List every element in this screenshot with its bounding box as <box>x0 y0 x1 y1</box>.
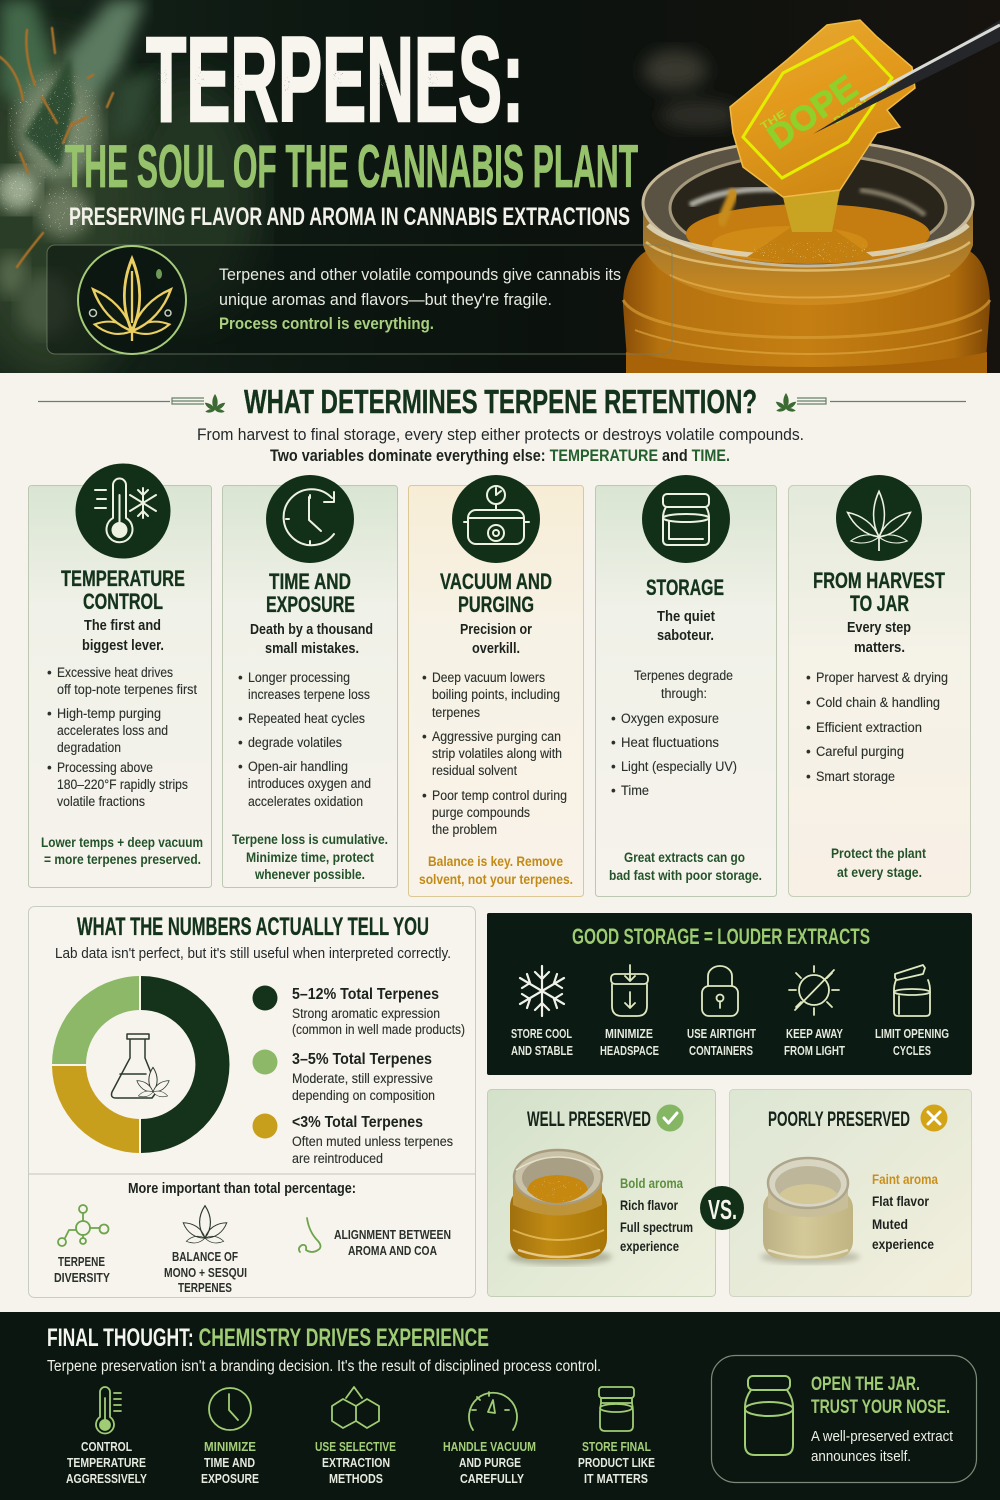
bullet list: • <box>611 783 616 798</box>
item: limit opening: LIMIT OPENING <box>875 1027 949 1041</box>
step: minimize time: MINIMIZE <box>204 1440 256 1454</box>
card takeaway: Minimize time, protect <box>246 849 374 865</box>
bullet list: increases terpene loss <box>248 687 370 702</box>
intro text: Process control is everything. <box>219 314 434 333</box>
legend: 3-5 percent: depending on composition <box>292 1088 435 1103</box>
bullet list <box>47 665 197 809</box>
card tagline: Precision or <box>460 622 532 638</box>
comparison text: experience <box>872 1236 934 1252</box>
callout: open the jar <box>712 1356 976 1482</box>
step: vacuum gauge: HANDLE VACUUM <box>443 1440 536 1454</box>
card takeaway: Lower temps + deep vacuum <box>41 834 203 850</box>
comparison text: Faint aroma <box>872 1171 938 1187</box>
bullet list: • <box>47 665 52 680</box>
bullet list: • <box>238 735 243 750</box>
icon: molecule with label <box>54 1205 111 1285</box>
card tagline <box>847 620 911 656</box>
panel: hero banner <box>0 0 1000 380</box>
bullet list: • <box>238 711 243 726</box>
card takeaway: Great extracts can go <box>624 849 745 865</box>
card takeaway <box>41 834 203 867</box>
step: selective extraction: EXTRACTION <box>322 1456 390 1470</box>
card tagline: Death by a thousand <box>250 622 373 638</box>
card takeaway: at every stage. <box>837 864 922 880</box>
title <box>146 11 524 147</box>
intro text: Terpenes and other volatile compounds give cannabis its <box>219 265 621 284</box>
step: store final product <box>578 1387 655 1486</box>
bullet list: degrade volatiles <box>248 735 342 750</box>
card tagline: The first and <box>84 618 161 634</box>
bullet list: Heat fluctuations <box>621 735 719 750</box>
bullet list: • <box>806 769 811 784</box>
bullet list: • <box>238 670 243 685</box>
item: airtight containers <box>687 966 756 1058</box>
bullet list: Poor temp control during <box>432 788 567 803</box>
comparison text: Bold aroma <box>620 1175 683 1191</box>
bullet list: introduces oxygen and <box>248 776 371 791</box>
bullet list: Excessive heat drives <box>57 665 173 680</box>
item: store cool: STORE COOL <box>511 1027 572 1041</box>
image: jar of amber extract <box>623 20 990 373</box>
step: control temperature: CONTROL <box>81 1440 132 1454</box>
card tagline: matters. <box>854 640 905 656</box>
section intro text: From harvest to final storage, every step either protects or destroys volatile compounds. <box>197 426 804 444</box>
icon: jar <box>642 475 730 563</box>
card heading: CONTROL <box>83 589 163 614</box>
legend: 5-12 percent: Strong aromatic expression <box>292 1006 440 1021</box>
callout headline: TRUST YOUR NOSE. <box>811 1397 950 1418</box>
bullet list <box>611 668 737 798</box>
bullet list: • <box>806 744 811 759</box>
card tagline: The quiet <box>657 609 715 625</box>
item: airtight containers: USE AIRTIGHT <box>687 1027 756 1041</box>
callout text: A well-preserved extract <box>811 1429 953 1445</box>
heading: terpene retention: WHAT DETERMINES TERPENE RETENTION? <box>244 383 757 420</box>
bullet list: • <box>806 720 811 735</box>
tagline: PRESERVING FLAVOR AND AROMA IN CANNABIS EXTRACTIONS <box>69 203 630 231</box>
title: TERPENES: <box>146 11 524 147</box>
bullet list <box>238 670 371 809</box>
item: minimize headspace: HEADSPACE <box>600 1044 659 1058</box>
item: keep from light: FROM LIGHT <box>784 1044 845 1058</box>
section intro text <box>197 426 804 465</box>
step: store final product: STORE FINAL <box>582 1440 651 1454</box>
icon: cannabis leaf <box>836 475 922 561</box>
bullet list: Oxygen exposure <box>621 711 719 726</box>
card heading: FROM HARVEST <box>813 568 945 593</box>
card heading <box>813 568 945 616</box>
card takeaway: bad fast with poor storage. <box>609 867 762 883</box>
icon: vacuum pot <box>452 475 540 563</box>
callout headline: OPEN THE JAR. <box>811 1374 920 1395</box>
panel: good storage <box>487 913 972 1075</box>
logo on extract slab: DOPE <box>761 68 865 157</box>
panel: vacuum and purging <box>408 475 584 896</box>
sub-heading: more important: More important than total percentage: <box>128 1181 356 1197</box>
panel heading: GOOD STORAGE = LOUDER EXTRACTS <box>572 924 870 949</box>
bullet list: 180–220°F rapidly strips <box>57 777 188 792</box>
item: airtight containers: CONTAINERS <box>689 1044 753 1058</box>
card takeaway: solvent, not your terpenes. <box>419 871 573 887</box>
bullet list: • <box>806 695 811 710</box>
bullet list: Open-air handling <box>248 759 348 774</box>
card heading: TO JAR <box>850 591 909 616</box>
bullet list: Proper harvest & drying <box>816 670 948 685</box>
footer intro: Terpene preservation isn't a branding decision. It's the result of disciplined process control. <box>47 1358 601 1375</box>
bullet list: Longer processing <box>248 670 350 685</box>
card tagline <box>82 618 164 654</box>
step: vacuum gauge <box>443 1392 536 1486</box>
bullet list: Careful purging <box>816 744 904 759</box>
bullet list: Efficient extraction <box>816 720 922 735</box>
bullet list: • <box>422 729 427 744</box>
card tagline: biggest lever. <box>82 638 164 654</box>
item: store cool <box>511 966 573 1058</box>
icon: jar outline <box>745 1376 793 1455</box>
card takeaway: Balance is key. Remove <box>428 853 563 869</box>
card heading: EXPOSURE <box>266 592 355 617</box>
callout headline <box>811 1374 950 1418</box>
step: control temperature: TEMPERATURE <box>67 1456 146 1470</box>
panel: from harvest to jar <box>788 475 970 896</box>
bullet list: Processing above <box>57 760 153 775</box>
bullet list <box>422 670 567 837</box>
legend: 3-5 percent: Moderate, still expressive <box>292 1071 433 1086</box>
icon: cannabis leaf badge <box>78 246 186 354</box>
card heading <box>266 569 355 617</box>
icon: nose with label: AROMA AND COA <box>348 1244 437 1258</box>
item: minimize headspace: MINIMIZE <box>605 1027 653 1041</box>
bullet list: through: <box>661 686 707 701</box>
bullet list: Deep vacuum lowers <box>432 670 545 685</box>
item: limit opening: CYCLES <box>893 1044 931 1058</box>
bullet list: Repeated heat cycles <box>248 711 365 726</box>
bullet list: the problem <box>432 822 497 837</box>
bullet list: • <box>611 735 616 750</box>
comparison text: experience <box>620 1238 679 1254</box>
step: vacuum gauge: AND PURGE <box>459 1456 521 1470</box>
logo on extract slab: THE <box>759 108 789 133</box>
card heading: VACUUM AND <box>440 569 552 594</box>
comparison text: Full spectrum <box>620 1219 693 1235</box>
legend: 3-5 percent: 3–5% Total Terpenes <box>292 1051 432 1068</box>
bullet list: • <box>422 670 427 685</box>
card tagline: Every step <box>847 620 911 636</box>
panel: time and exposure <box>222 475 398 888</box>
bullet list: • <box>238 759 243 774</box>
bullet list: accelerates oxidation <box>248 794 363 809</box>
step: selective extraction: USE SELECTIVE <box>315 1440 396 1454</box>
card tagline <box>250 622 373 657</box>
card takeaway <box>419 853 573 887</box>
panel: what the numbers tell you <box>28 906 476 1298</box>
bullet list: Cold chain & handling <box>816 695 940 710</box>
bullet list: off top-note terpenes first <box>57 682 197 697</box>
bullet list: Aggressive purging can <box>432 729 561 744</box>
card takeaway <box>831 845 926 880</box>
bullet list: • <box>806 670 811 685</box>
icon: molecule with label: TERPENE <box>58 1255 105 1269</box>
intro callout box <box>47 245 672 354</box>
card tagline <box>657 609 715 644</box>
item: keep from light: KEEP AWAY <box>786 1027 844 1041</box>
icon: leaf with label: MONO + SESQUI <box>164 1266 247 1280</box>
bullet list: Time <box>621 783 649 798</box>
image: cannabis flower <box>0 0 260 380</box>
comparison text: Rich flavor <box>620 1197 678 1213</box>
comparison text <box>872 1171 938 1252</box>
callout text: announces itself. <box>811 1449 911 1465</box>
flower trichomes <box>0 70 103 238</box>
comparison text <box>620 1175 693 1254</box>
item: keep from light <box>784 966 845 1058</box>
bullet list: terpenes <box>432 705 480 720</box>
bullet list: • <box>422 788 427 803</box>
icon: leaf with label: BALANCE OF <box>172 1250 238 1264</box>
legend: under 3 percent: Often muted unless terpenes <box>292 1134 453 1149</box>
bullet list: Light (especially UV) <box>621 759 737 774</box>
bullet list <box>806 670 948 784</box>
comparison heading: POORLY PRESERVED <box>768 1108 910 1131</box>
bullet list: purge compounds <box>432 805 530 820</box>
card takeaway: whenever possible. <box>254 866 365 882</box>
callout text <box>811 1429 953 1465</box>
bullet list: boiling points, including <box>432 687 560 702</box>
card takeaway: = more terpenes preserved. <box>44 851 201 867</box>
card heading <box>440 569 552 617</box>
logo on extract slab <box>743 37 892 178</box>
card takeaway: Protect the plant <box>831 845 926 861</box>
image: pale jar <box>760 1158 860 1264</box>
section intro text: Two variables dominate everything else: TEMPERATURE and TIME. <box>270 447 730 465</box>
logo on extract slab: DEPOT <box>832 96 872 126</box>
card heading: PURGING <box>458 592 534 617</box>
card heading: STORAGE <box>646 575 724 600</box>
background bokeh <box>643 50 740 129</box>
bullet list: residual solvent <box>432 763 517 778</box>
legend: 5-12 percent <box>252 986 465 1037</box>
bullet list: High-temp purging <box>57 706 161 721</box>
item: minimize headspace <box>600 965 659 1058</box>
card takeaway <box>232 831 388 882</box>
panel: well preserved <box>488 1090 716 1296</box>
card tagline: overkill. <box>472 641 520 657</box>
step: minimize time: TIME AND <box>204 1456 255 1470</box>
intro text <box>219 265 621 333</box>
bullet list: • <box>47 760 52 775</box>
legend: 5-12 percent: 5–12% Total Terpenes <box>292 986 439 1003</box>
legend: under 3 percent: are reintroduced <box>292 1151 383 1166</box>
comparison heading: WELL PRESERVED <box>527 1108 651 1131</box>
bullet list: • <box>611 711 616 726</box>
card takeaway <box>609 849 762 883</box>
item: store cool: AND STABLE <box>511 1044 573 1058</box>
panel subtitle: Lab data isn't perfect, but it's still useful when interpreted correctly. <box>55 946 451 962</box>
comparison text: Muted <box>872 1216 908 1232</box>
bullet list: Terpenes degrade <box>634 668 733 683</box>
card takeaway: Terpene loss is cumulative. <box>232 831 388 847</box>
card tagline <box>460 622 532 657</box>
icon: nose with label <box>299 1218 451 1258</box>
image: amber jar <box>508 1150 612 1265</box>
comparison text: Flat flavor <box>872 1193 929 1209</box>
card heading <box>61 566 185 614</box>
step: control temperature: AGGRESSIVELY <box>66 1472 148 1486</box>
badge: versus <box>700 1186 744 1230</box>
icon: thermometer and snowflake <box>76 464 170 558</box>
icon: leaf with label <box>164 1206 247 1295</box>
icon: clock with arrow <box>266 475 354 563</box>
bullet list: • <box>611 759 616 774</box>
step: selective extraction <box>315 1387 396 1486</box>
panel: storage <box>596 475 776 896</box>
panel: temperature control <box>28 464 212 888</box>
card tagline: saboteur. <box>657 628 714 644</box>
panel: poorly preserved <box>730 1090 972 1296</box>
badge: versus: VS. <box>708 1194 737 1225</box>
step: store final product: PRODUCT LIKE <box>578 1456 655 1470</box>
step: vacuum gauge: CAREFULLY <box>460 1472 525 1486</box>
bullet list: Smart storage <box>816 769 895 784</box>
icon: nose with label: ALIGNMENT BETWEEN <box>334 1228 451 1242</box>
panel: final thought footer <box>0 1312 1000 1500</box>
intro text: unique aromas and flavors—but they're fragile. <box>219 290 552 309</box>
legend: under 3 percent <box>252 1114 453 1166</box>
icon: leaf with label: TERPENES <box>178 1281 232 1295</box>
panel heading: WHAT THE NUMBERS ACTUALLY TELL YOU <box>77 913 429 941</box>
icon: molecule with label: DIVERSITY <box>54 1271 111 1285</box>
bullet list: • <box>47 706 52 721</box>
legend: 5-12 percent: (common in well made products) <box>292 1022 465 1037</box>
icon: flask with leaf <box>112 1034 171 1098</box>
legend: under 3 percent: <3% Total Terpenes <box>292 1114 423 1131</box>
card heading: TIME AND <box>269 569 351 594</box>
card tagline: small mistakes. <box>265 641 359 657</box>
step: minimize time: EXPOSURE <box>201 1472 259 1486</box>
step: minimize time <box>201 1388 259 1486</box>
bullet list: accelerates loss and <box>57 723 168 738</box>
item: limit opening <box>875 965 949 1058</box>
legend: 3-5 percent <box>252 1050 435 1103</box>
panel: main cream section <box>0 373 1000 1312</box>
step: selective extraction: METHODS <box>329 1472 383 1486</box>
step: store final product: IT MATTERS <box>584 1472 648 1486</box>
card heading: TEMPERATURE <box>61 566 185 591</box>
donut chart <box>52 976 229 1153</box>
bullet list: degradation <box>57 740 121 755</box>
step: control temperature <box>66 1387 148 1486</box>
footer heading: FINAL THOUGHT: CHEMISTRY DRIVES EXPERIENCE <box>47 1324 489 1352</box>
bullet list: strip volatiles along with <box>432 746 562 761</box>
icon: metal tweezers <box>813 20 1000 134</box>
bullet list: volatile fractions <box>57 794 145 809</box>
